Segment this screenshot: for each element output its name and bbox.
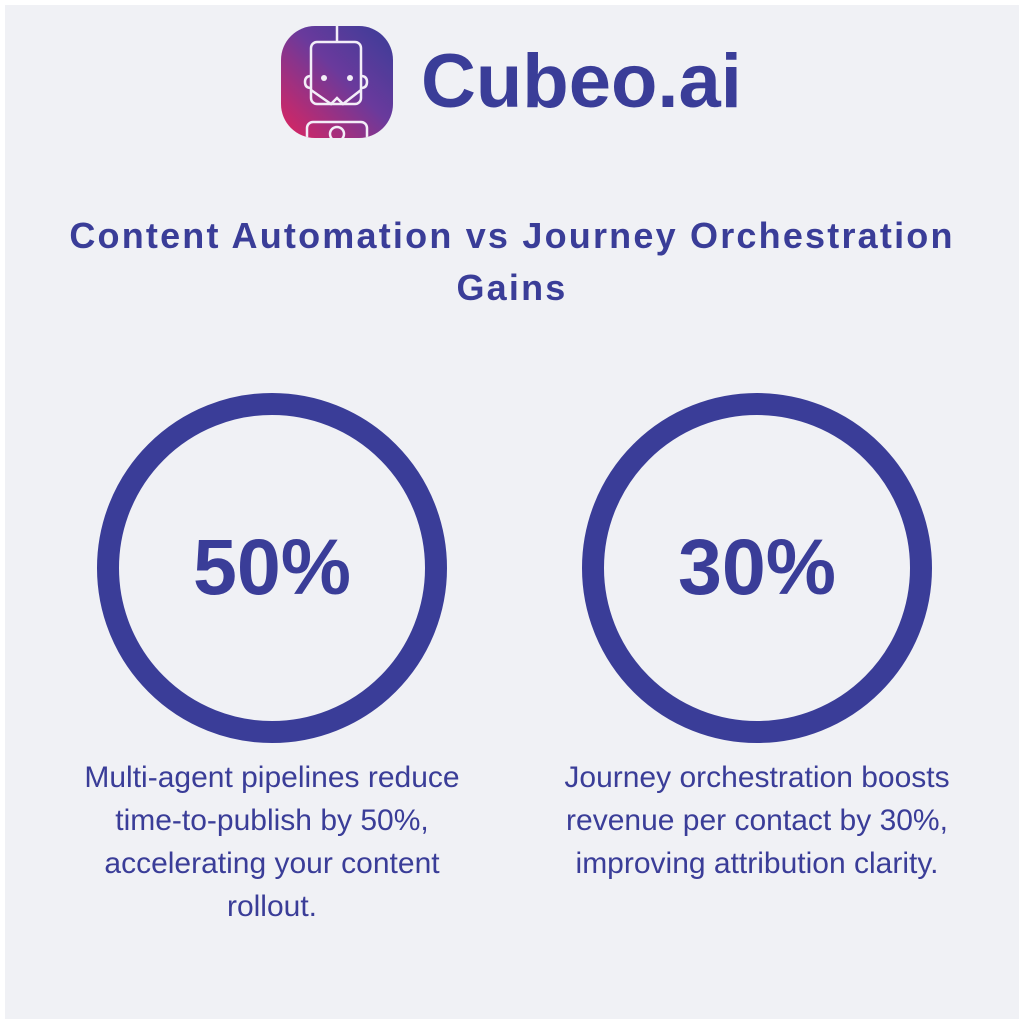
- stat 30%: 30%: [678, 522, 836, 611]
- ring chart 50%: [97, 393, 447, 743]
- ring chart 30%: [582, 393, 932, 743]
- description: revenue per contact by 30%,: [566, 804, 948, 837]
- description: Journey orchestration boosts: [564, 761, 950, 794]
- description: improving attribution clarity.: [576, 847, 938, 880]
- panel: content automation: [84, 393, 460, 923]
- icon: robot: [281, 26, 393, 138]
- description: rollout.: [227, 890, 317, 923]
- description: time-to-publish by 50%,: [115, 804, 429, 837]
- logo: [281, 26, 742, 138]
- title: Content Automation vs Journey Orchestration: [69, 215, 955, 256]
- description: accelerating your content: [104, 847, 440, 880]
- brand name: Cubeo.ai: [421, 39, 742, 124]
- description: [564, 761, 950, 880]
- title: Gains: [456, 267, 568, 308]
- title: [69, 215, 955, 308]
- panel: journey orchestration: [564, 393, 950, 880]
- description: [84, 761, 460, 923]
- description: Multi-agent pipelines reduce: [84, 761, 460, 794]
- stat 50%: 50%: [193, 522, 351, 611]
